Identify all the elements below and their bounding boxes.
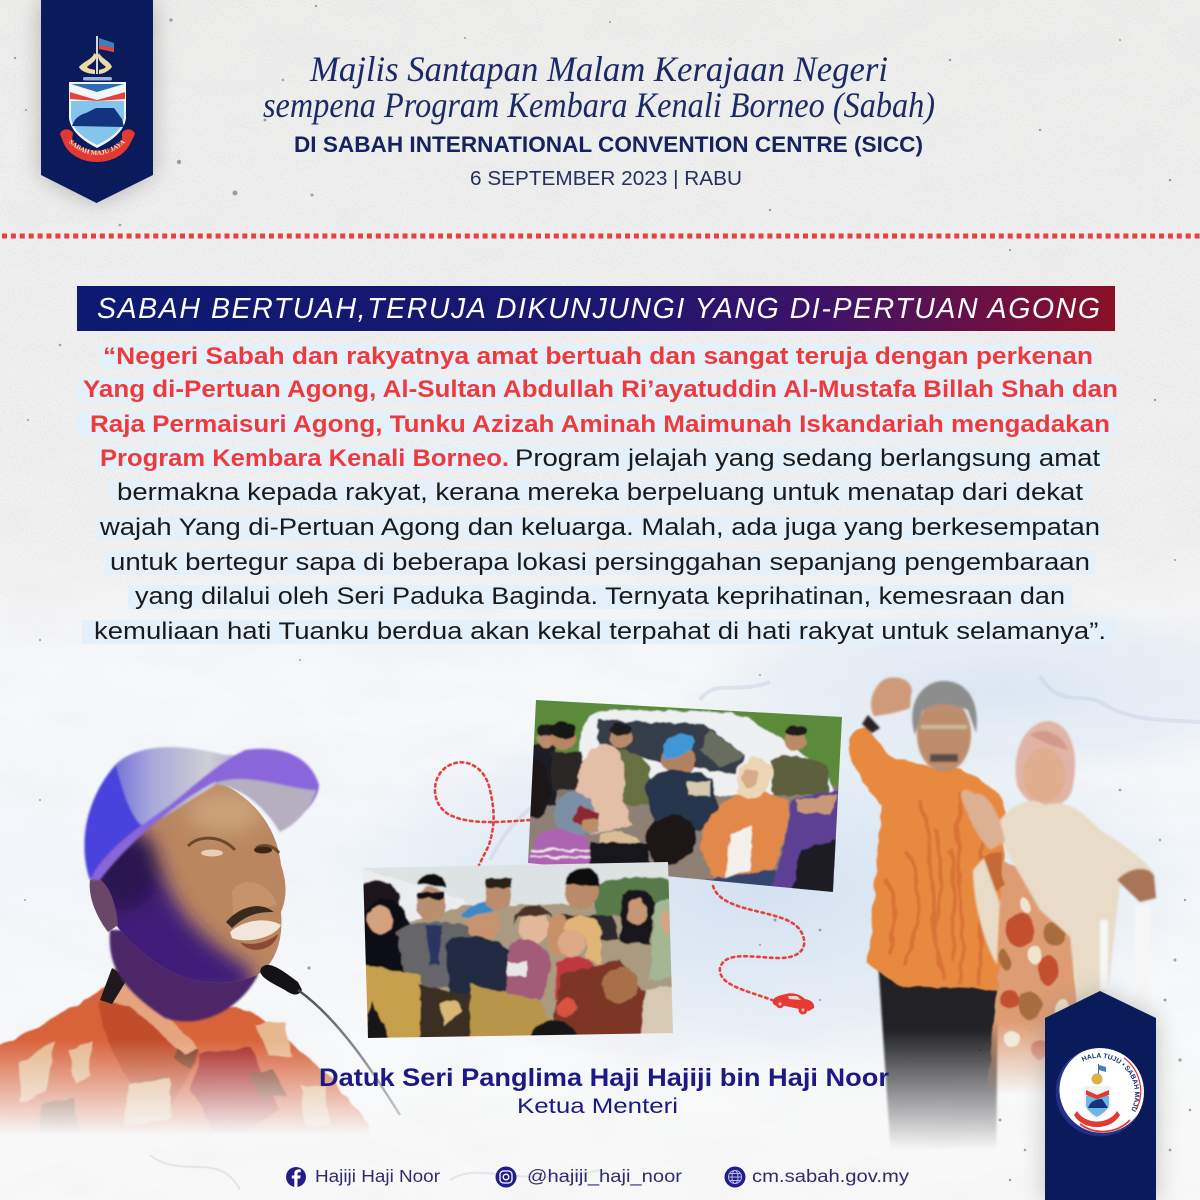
quote text block: untuk bertegur sapa di beberapa lokasi persinggahan sepanjang pengembaraan xyxy=(110,549,1090,576)
route: dotted road to car xyxy=(713,886,804,1000)
icon: globe xyxy=(724,1166,746,1188)
photo: Agong greeting the crowd xyxy=(528,700,842,892)
date: 6 SEPTEMBER 2023 | RABU xyxy=(470,168,742,190)
icon: facebook xyxy=(286,1167,306,1187)
cap xyxy=(84,747,319,880)
ear xyxy=(90,878,118,932)
person: Yang di-Pertuan Agong xyxy=(850,677,1007,1170)
quote text block: bermakna kepada rakyat, kerana mereka berpeluang untuk menatap dari dekat xyxy=(117,479,1083,506)
title: script heading: sempena Program Kembara Kenali Borneo (Sabah) xyxy=(263,85,935,125)
eyes and mouth xyxy=(188,838,281,950)
person: Raja Permaisuri Agong xyxy=(961,721,1156,1100)
footer: Facebook: Hajiji Haji Noor xyxy=(315,1166,440,1186)
quote text block: yang dilalui oleh Seri Paduka Baginda. Ternyata keprihatinan, kemesraan dan xyxy=(135,583,1065,610)
quote text block: Yang di-Pertuan Agong, Al-Sultan Abdullah Ri’ayatuddin Al-Mustafa Billah Shah dan xyxy=(83,376,1118,403)
icon: Sabah coat of arms xyxy=(60,36,135,162)
person: Chief Minister portrait xyxy=(0,747,400,1150)
quote text block: Program jelajah yang sedang berlangsung amat xyxy=(515,445,1100,472)
icon: instagram xyxy=(496,1166,516,1188)
footer: website: cm.sabah.gov.my xyxy=(752,1166,909,1186)
caption: Chief Minister name xyxy=(319,1064,889,1118)
icon: microphone xyxy=(260,965,400,1115)
headline banner xyxy=(77,286,1115,331)
icon: Sabah coat of arms: SABAH MAJU JAYA xyxy=(69,140,126,156)
route: dotted loop xyxy=(435,762,530,865)
title: script heading xyxy=(263,49,935,125)
quote text block: kemuliaan hati Tuanku berdua akan kekal terpahat di hati rakyat untuk selamanya”. xyxy=(94,618,1106,645)
footer: Instagram xyxy=(496,1166,682,1188)
quote text block: Program Kembara Kenali Borneo. xyxy=(100,445,509,472)
caption: Chief Minister name: Datuk Seri Panglima Haji Hajiji bin Haji Noor xyxy=(319,1064,889,1092)
caption: Chief Minister name: Ketua Menteri xyxy=(517,1095,678,1118)
title: script heading: Majlis Santapan Malam Kerajaan Negeri xyxy=(309,49,888,89)
icon: Hala Tuju circular logo: HALA TUJU • SABAH MAJU JAYA xyxy=(1081,1053,1140,1112)
neck xyxy=(110,930,258,1021)
footer: Instagram: @hajiji_haji_noor xyxy=(527,1166,682,1187)
face xyxy=(97,783,286,984)
photo: royal group with dancers xyxy=(363,862,673,1038)
subtitle: venue: DI SABAH INTERNATIONAL CONVENTION CENTRE (SICC) xyxy=(294,132,923,157)
ribbon: top state crest xyxy=(28,0,166,212)
headline banner: SABAH BERTUAH,TERUJA DIKUNJUNGI YANG DI-PERTUAN AGONG xyxy=(97,293,1100,325)
quote text block xyxy=(76,343,1121,645)
quote text block: wajah Yang di-Pertuan Agong dan keluarga. Malah, ada juga yang berkesempatan xyxy=(99,514,1100,541)
quote text block: “Negeri Sabah dan rakyatnya amat bertuah dan sangat teruja dengan perkenan xyxy=(103,343,1093,370)
footer: website xyxy=(724,1166,909,1188)
icon: red car xyxy=(773,993,814,1014)
quote text block: Raja Permaisuri Agong, Tunku Azizah Aminah Maimunah Iskandariah mengadakan xyxy=(90,411,1110,438)
